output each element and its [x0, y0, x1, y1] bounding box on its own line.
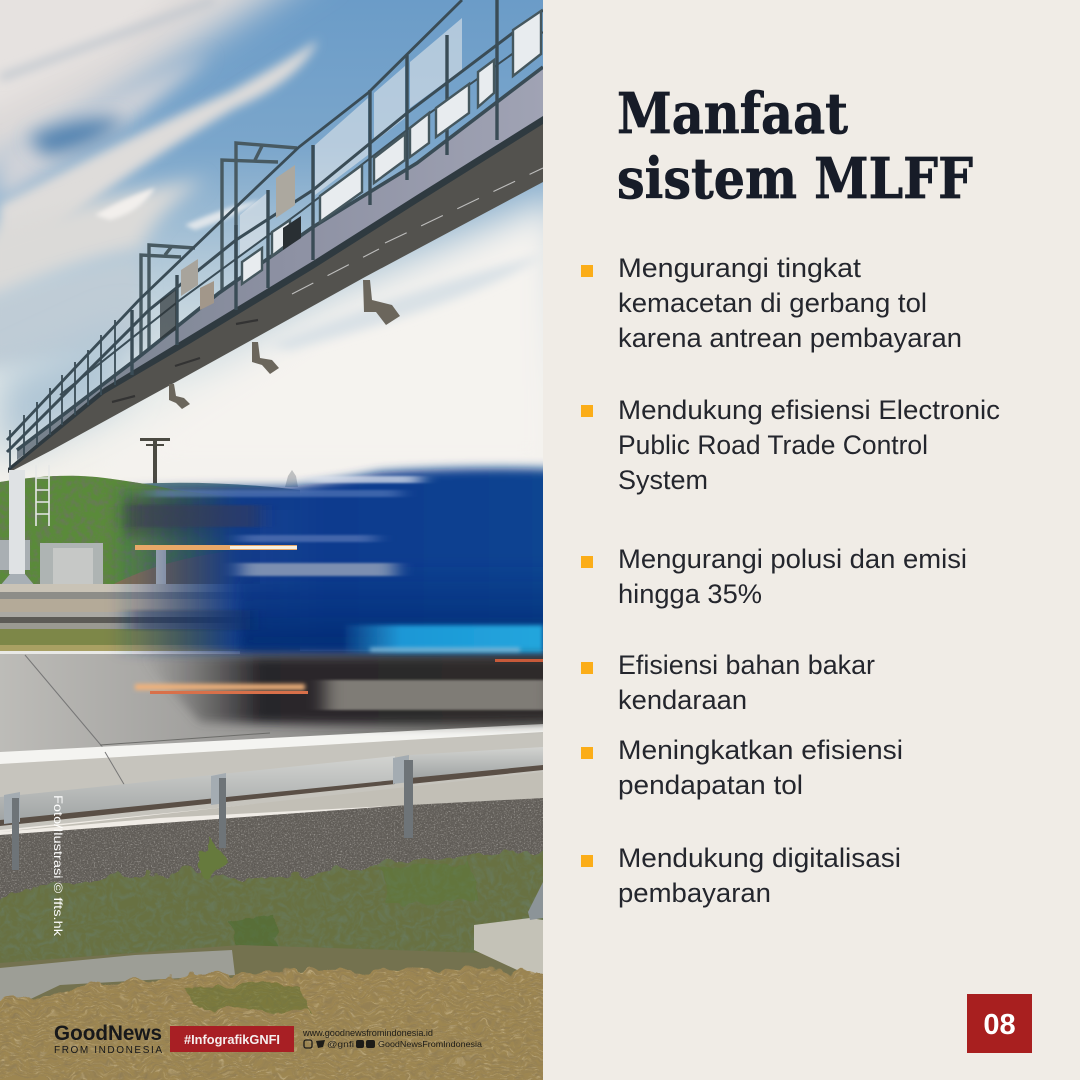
benefit 2: Public Road Trade Control	[618, 430, 928, 460]
benefit 5: Meningkatkan efisiensi	[618, 735, 903, 765]
benefit 4: kendaraan	[618, 685, 747, 715]
title	[617, 81, 973, 212]
gantry: camera frames	[141, 143, 297, 365]
social links	[302, 1028, 482, 1049]
photo: dry grass backing	[0, 1075, 542, 1080]
gantry: railings	[7, 0, 543, 468]
benefit 5: pendapatan tol	[618, 770, 803, 800]
benefit 6: pembayaran	[618, 878, 771, 908]
photo: road surface	[0, 651, 543, 830]
photo: pylon, ladder and cabinets	[0, 466, 231, 592]
page number badge: 08	[983, 1009, 1016, 1041]
social icons	[304, 1040, 375, 1048]
benefit 6	[581, 843, 901, 908]
photo: foreground guardrail	[0, 747, 543, 870]
gantry: underside deck	[8, 118, 543, 473]
social links: GoodNewsFromIndonesia	[378, 1039, 482, 1049]
hashtag badge	[170, 1026, 294, 1052]
photo credit: Foto/Ilustrasi © ffts.hk	[51, 795, 65, 937]
title: sistem MLFF	[617, 146, 973, 212]
photo: dry grass	[0, 966, 543, 1080]
logo: GoodNews from Indonesia: FROM INDONESIA	[54, 1045, 162, 1056]
photo: grass strip	[0, 836, 543, 963]
benefit 1: karena antrean pembayaran	[618, 323, 962, 353]
photo: utility pole	[140, 438, 170, 485]
benefit 4	[581, 650, 875, 715]
benefit 1: Mengurangi tingkat	[618, 253, 862, 283]
photo: toll gantry and speeding truck	[0, 0, 543, 1080]
photo: blurred blue truck	[110, 468, 560, 724]
title: Manfaat	[617, 81, 848, 147]
gantry: see-through upper panes	[240, 18, 462, 255]
gantry: equipment boxes	[276, 165, 295, 218]
benefit 3	[581, 544, 967, 609]
social links: @gnfi	[327, 1040, 354, 1049]
benefit 3: hingga 35%	[618, 579, 762, 609]
page number badge	[967, 994, 1032, 1053]
benefit 3: Mengurangi polusi dan emisi	[618, 544, 967, 574]
photo: background guardrails and verge	[0, 592, 300, 651]
gantry: side panel	[17, 67, 543, 460]
benefit 2: System	[618, 465, 708, 495]
photo: concrete curb	[0, 882, 543, 1001]
photo: gantry structure	[7, 0, 543, 473]
photo: hills and shrubs	[0, 470, 300, 595]
hashtag badge: #InfografikGNFI	[184, 1032, 280, 1047]
benefit 6: Mendukung digitalisasi	[618, 843, 901, 873]
benefit 2: Mendukung efisiensi Electronic	[618, 395, 1000, 425]
benefit 5	[581, 735, 903, 800]
photo: gravel verge	[0, 798, 543, 900]
social links: www.goodnewsfromindonesia.id	[302, 1028, 433, 1038]
benefit 1: kemacetan di gerbang tol	[618, 288, 927, 318]
logo: GoodNews from Indonesia	[54, 1024, 162, 1053]
gantry: cameras	[169, 280, 400, 409]
benefit 2	[581, 395, 1000, 495]
benefits list	[581, 253, 1000, 908]
benefit 1	[581, 253, 962, 353]
gantry: lower window frames	[242, 11, 541, 284]
benefit 4: Efisiensi bahan bakar	[618, 650, 875, 680]
logo: GoodNews from Indonesia: GoodNews	[54, 1022, 162, 1045]
photo: sky with clouds	[0, 0, 560, 490]
